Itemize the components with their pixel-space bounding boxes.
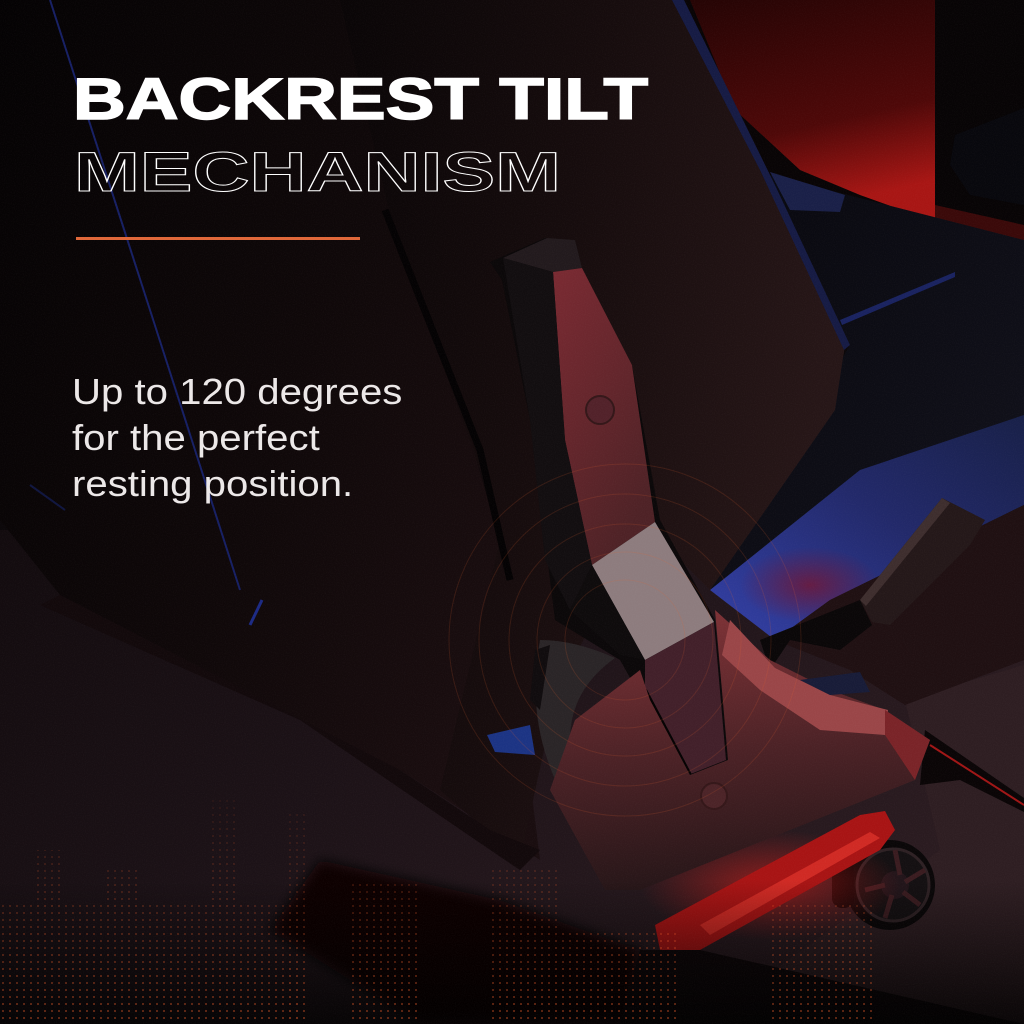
seat cushion: [710, 108, 1024, 705]
curved hinge: [530, 640, 615, 830]
backrest rear fabric: [340, 0, 850, 860]
description text: for the perfect: [72, 417, 320, 458]
description text: [72, 371, 402, 504]
power cable: [920, 730, 1024, 812]
wheel caster: [832, 840, 935, 930]
side base fabric: [40, 595, 540, 870]
title: backrest tilt: BACKREST TILT: [73, 67, 648, 132]
description text: Up to 120 degrees: [72, 371, 402, 412]
tilt mechanism bracket: [490, 238, 730, 775]
base casting: [550, 610, 930, 890]
bottom shading: [0, 880, 1024, 1024]
orange divider: [76, 237, 360, 240]
red-lit star base arm: [270, 811, 1024, 1024]
description text: resting position.: [72, 463, 353, 504]
red back wall: [660, 0, 1024, 250]
seat lever handle: [760, 498, 985, 670]
backrest side shell: [0, 0, 540, 860]
dotted orange equaliser pattern: [0, 800, 875, 1024]
floor: [0, 530, 1024, 1024]
concentric pulse rings: [449, 464, 801, 816]
